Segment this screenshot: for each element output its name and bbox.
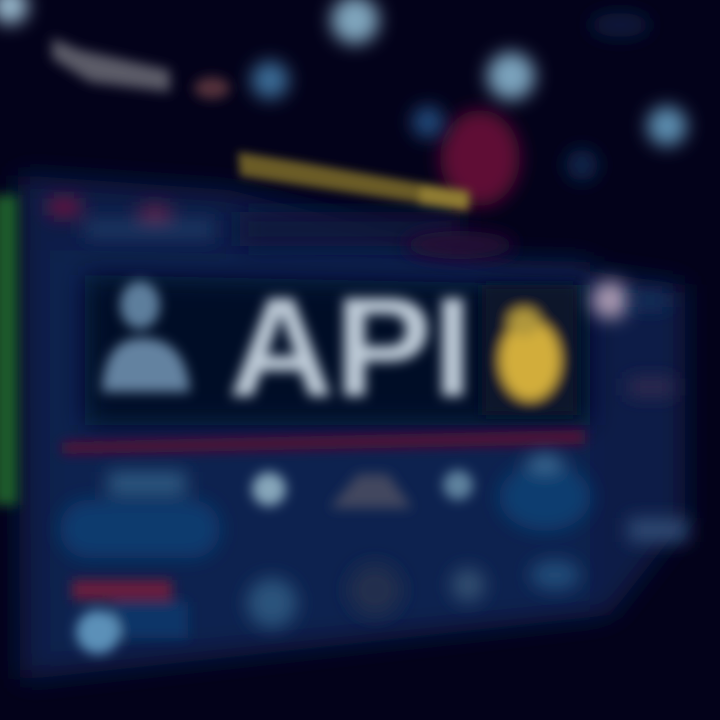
dark overlay beneath heading: [405, 231, 515, 259]
main dashboard panel: [18, 175, 685, 680]
bottom left card: [72, 580, 188, 654]
padlock icon: [482, 285, 577, 415]
lower right cloud: [499, 455, 591, 531]
lower left cloud: [60, 472, 220, 558]
pink dot: [591, 281, 629, 319]
user icon: [102, 281, 190, 392]
API title: API: [228, 268, 473, 427]
floating dots: [0, 0, 687, 181]
central dark band: [85, 212, 590, 425]
yellow heading: [238, 152, 470, 211]
green side bar: [0, 195, 18, 505]
header tabs: [48, 198, 215, 238]
bottom row icons: [247, 560, 580, 628]
right side panel items: [628, 292, 688, 542]
white top left heading: [52, 38, 230, 99]
crimson divider bar: [62, 430, 585, 454]
lower row icons: [252, 470, 473, 508]
crimson circle: [440, 110, 520, 206]
